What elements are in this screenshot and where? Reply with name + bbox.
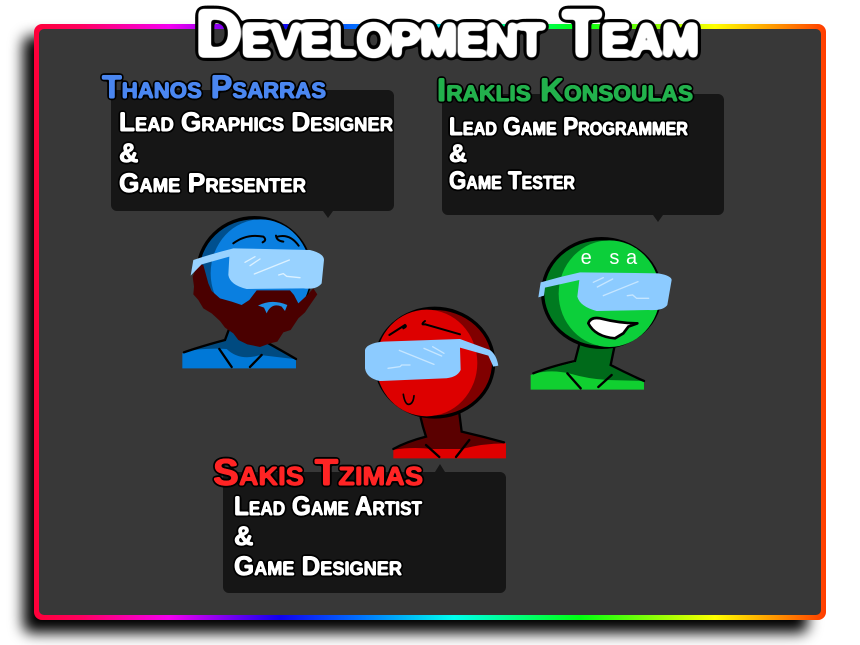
roles: Sakis: &: [234, 521, 254, 551]
esa badge: esa: [581, 247, 638, 269]
avatar: Iraklis, green head with esa badge and visor: [531, 239, 672, 390]
roles: Thanos: Game Presenter: [119, 168, 306, 198]
name: Thanos Psarras: Thanos Psarras: [102, 69, 326, 105]
name: Sakis Tzimas: Sakis Tzimas: [213, 452, 423, 493]
speech bubble: Sakis: [223, 464, 506, 593]
name: Iraklis Konsoulas: Iraklis Konsoulas: [437, 72, 693, 108]
roles: Thanos: Lead Graphics Designer: [119, 107, 393, 137]
avatar: Sakis, red head with visor: [365, 308, 506, 458]
roles: Iraklis: &: [449, 140, 467, 168]
roles: Sakis: Game Designer: [234, 551, 402, 581]
avatar: Thanos, blue head with beard and visor: [182, 218, 324, 368]
roles: Iraklis: Game Tester: [449, 167, 575, 195]
roles: Iraklis: Lead Game Programmer: [449, 113, 688, 141]
roles: Thanos: [119, 107, 393, 198]
roles: Sakis: Lead Game Artist: [234, 491, 422, 521]
roles: Sakis: [234, 491, 422, 581]
roles: Iraklis: [449, 113, 688, 195]
roles: Thanos: &: [119, 138, 138, 168]
speech bubble: Thanos: [111, 90, 394, 218]
smile: [588, 318, 637, 338]
speech bubble: Iraklis: [442, 94, 724, 222]
